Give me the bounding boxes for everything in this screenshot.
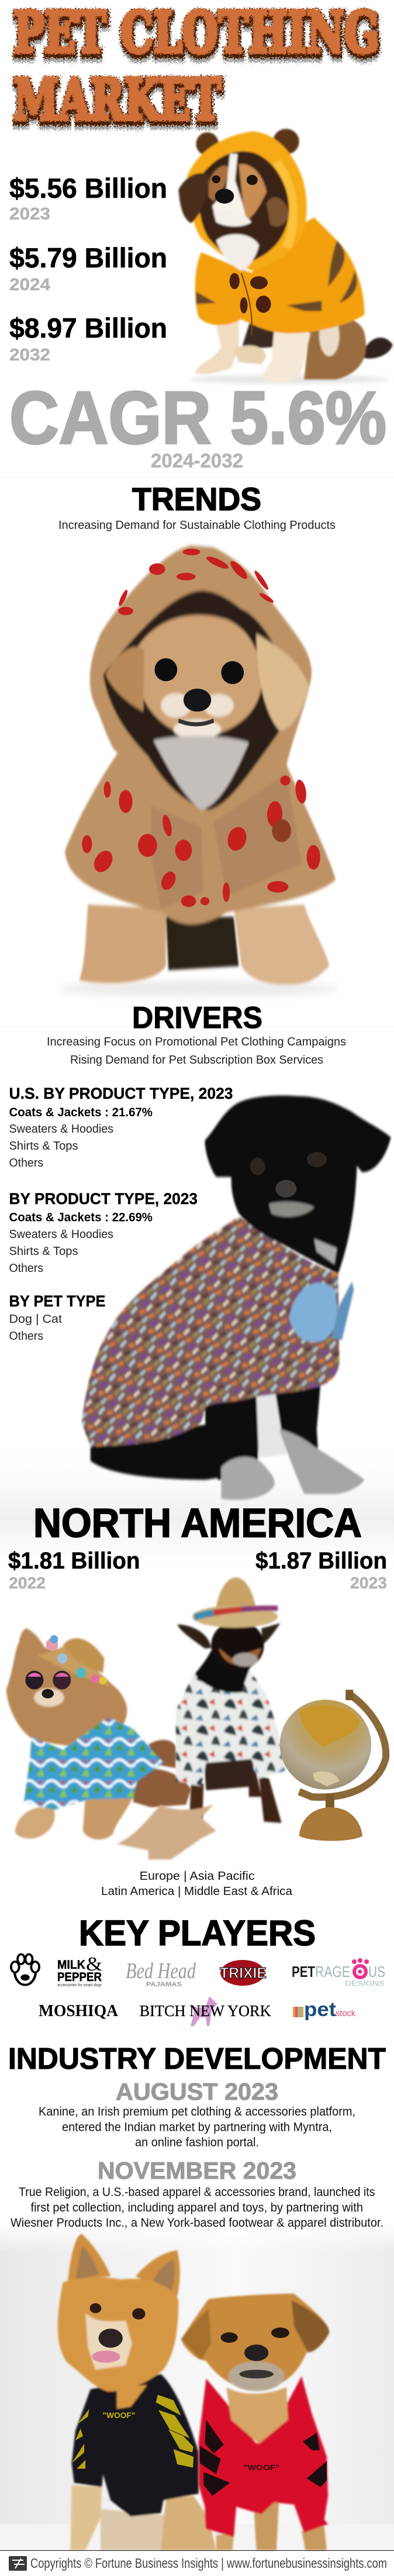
logo: paw	[11, 1954, 39, 1985]
footer	[0, 2550, 394, 2571]
title dark fur layer: MARKET	[14, 69, 222, 135]
photo: dog in orange hoodie	[178, 129, 393, 384]
heading: trends: TRENDS	[132, 481, 261, 517]
global by product type	[9, 1190, 198, 1275]
stat 2022	[8, 1548, 140, 1592]
other regions: Europe | Asia Pacific	[140, 1870, 255, 1883]
November text	[11, 2186, 383, 2230]
U.S. by product type	[9, 1085, 233, 1170]
globe	[280, 1690, 386, 1841]
stat 2023: 2023	[350, 1574, 387, 1592]
regional stats	[8, 1548, 387, 1592]
drivers text	[47, 1036, 346, 1067]
global by product type: Others	[9, 1262, 43, 1275]
by pet type	[9, 1292, 105, 1343]
right dog face	[221, 2327, 289, 2378]
miniature pinscher in shirt	[176, 1577, 285, 1823]
heading: drivers	[47, 1001, 346, 1067]
global by product type: BY PRODUCT TYPE, 2023	[9, 1190, 198, 1208]
development: November 2023: NOVEMBER 2023	[98, 2157, 296, 2184]
Pomeranian accessories	[25, 1635, 107, 1698]
sea shell	[117, 1805, 216, 1859]
logo: Milk & Pepper: &	[86, 1954, 102, 1975]
stat 2024: 2024	[9, 276, 50, 294]
left dog face	[90, 2303, 146, 2363]
August text: entered the Indian market by partnering with Myntra,	[62, 2120, 332, 2134]
stat 2023: $5.56 Billion	[9, 173, 167, 204]
November text: True Religion, a U.S.-based apparel & accessories brand, launched its	[19, 2186, 375, 2199]
other regions	[101, 1870, 293, 1898]
logo: Bitch New York	[140, 1996, 271, 2026]
title: Pet Clothing Market	[13, 0, 380, 139]
photo: dogs in Hawaiian shirts with globe	[6, 1577, 386, 1859]
global by product type: Coats & Jackets : 22.69%	[9, 1211, 153, 1224]
stat 2023: 2023	[9, 205, 50, 223]
stat 2023	[255, 1548, 387, 1592]
logo: Petrageous Designs: US	[368, 1963, 385, 1980]
logo: Trixie: TRIXIE	[220, 1964, 267, 1982]
red polka dots	[82, 549, 320, 907]
logo: Milk & Pepper	[57, 1954, 102, 1987]
stat 2024: $5.79 Billion	[9, 242, 167, 273]
logo: Milk & Pepper: PEPPER	[57, 1970, 102, 1984]
development: November 2023	[11, 2157, 383, 2230]
title dark fur layer	[14, 2, 380, 135]
logo: Bitch New York: BITCH NEW YORK	[140, 2002, 271, 2020]
stat 2032	[9, 312, 167, 364]
hoodie print: "WOOF"	[243, 2464, 280, 2472]
hoodie print: "WOOF"	[102, 2412, 135, 2420]
November text: first pet collection, including apparel and toys, by partnering with	[30, 2201, 363, 2214]
U.S. by product type: U.S. BY PRODUCT TYPE, 2023	[9, 1085, 233, 1102]
photo: black puppy in crochet sweater	[0, 1096, 394, 1575]
heading: industry development: INDUSTRY DEVELOPMENT	[8, 2042, 386, 2075]
stat 2023: $1.87 Billion	[255, 1548, 387, 1574]
logo: Trixie	[220, 1960, 267, 1986]
logo: Milk & Pepper: accessories for smart dogs	[57, 1983, 102, 1987]
logo: Petstock	[293, 1999, 355, 2021]
Pomeranian	[6, 1628, 191, 1839]
global by product type: Shirts & Tops	[9, 1245, 78, 1258]
stat 2022: 2022	[9, 1574, 46, 1592]
left dog in black hoodie	[58, 2234, 216, 2550]
other regions: Latin America | Middle East & Africa	[101, 1885, 293, 1898]
stat 2032: 2032	[9, 346, 50, 364]
logo: Petrageous Designs	[292, 1958, 385, 1987]
puppy face	[250, 1152, 327, 1198]
logo: Petstock: stock	[336, 2008, 355, 2018]
development: August 2023	[39, 2078, 355, 2149]
right dog in red hoodie	[181, 2293, 329, 2550]
August text	[39, 2105, 355, 2149]
heading: North America: NORTH AMERICA	[33, 1500, 362, 1546]
title orange fur layer: MARKET	[13, 67, 221, 133]
face details	[154, 658, 244, 724]
U.S. by product type: Sweaters & Hoodies	[9, 1123, 113, 1136]
logo: Petrageous Designs: RAGE	[315, 1963, 350, 1980]
heading: drivers: DRIVERS	[132, 1001, 262, 1035]
development: August 2023: AUGUST 2023	[116, 2078, 278, 2105]
U.S. by product type: Coats & Jackets : 21.67%	[9, 1106, 153, 1119]
stat 2032: $8.97 Billion	[9, 312, 167, 343]
drivers text: Rising Demand for Pet Subscription Box Services	[70, 1054, 323, 1067]
footer logo	[9, 2556, 27, 2571]
stat 2022: $1.81 Billion	[8, 1548, 140, 1574]
market size stats	[9, 173, 167, 364]
logo: Bed Head Pajamas: Bed Head	[126, 1959, 196, 1983]
CAGR figure: 2024-2032	[151, 450, 243, 472]
photo: two dogs in hoodies	[0, 2224, 394, 2550]
key player logos	[11, 1954, 385, 2026]
segment lists	[9, 1085, 233, 1343]
heading: trends	[58, 481, 336, 532]
title orange fur layer	[13, 0, 379, 133]
photo: dog in tan hooded cape	[58, 545, 340, 997]
by pet type: BY PET TYPE	[9, 1292, 105, 1310]
U.S. by product type: Others	[9, 1157, 43, 1170]
drivers text: Increasing Focus on Promotional Pet Clothing Campaigns	[47, 1036, 346, 1048]
logo: Petrageous Designs: PET	[292, 1963, 315, 1980]
logo: Bed Head Pajamas	[126, 1959, 196, 1988]
eyes, nose and buttons	[212, 175, 271, 335]
stat 2023	[9, 173, 167, 223]
title shadow layer	[14, 6, 380, 139]
logo: Petrageous Designs: DESIGNS	[345, 1979, 385, 1987]
logo: Moshiqa: MOSHIQA	[39, 2002, 119, 2020]
logo: Milk & Pepper: MILK	[57, 1958, 85, 1972]
logo: Petstock: pet	[304, 1999, 336, 2021]
U.S. by product type: Shirts & Tops	[9, 1140, 78, 1153]
trends text: Increasing Demand for Sustainable Clothing Products	[58, 519, 336, 532]
heading: key players: KEY PLAYERS	[79, 1913, 316, 1953]
stat 2024	[9, 242, 167, 294]
title shadow layer: MARKET	[14, 73, 222, 139]
global by product type: Sweaters & Hoodies	[9, 1228, 113, 1241]
by pet type: Others	[9, 1330, 43, 1343]
November text: Wiesner Products Inc., a New York-based footwear & apparel distributor.	[11, 2216, 383, 2230]
August text: an online fashion portal.	[135, 2135, 259, 2149]
August text: Kanine, an Irish premium pet clothing & accessories platform,	[39, 2105, 355, 2118]
by pet type: Dog | Cat	[9, 1313, 62, 1326]
logo: Bed Head Pajamas: PAJAMAS	[146, 1981, 182, 1988]
left hoodie stripes	[72, 2395, 193, 2469]
red hoodie chevrons	[200, 2420, 327, 2496]
